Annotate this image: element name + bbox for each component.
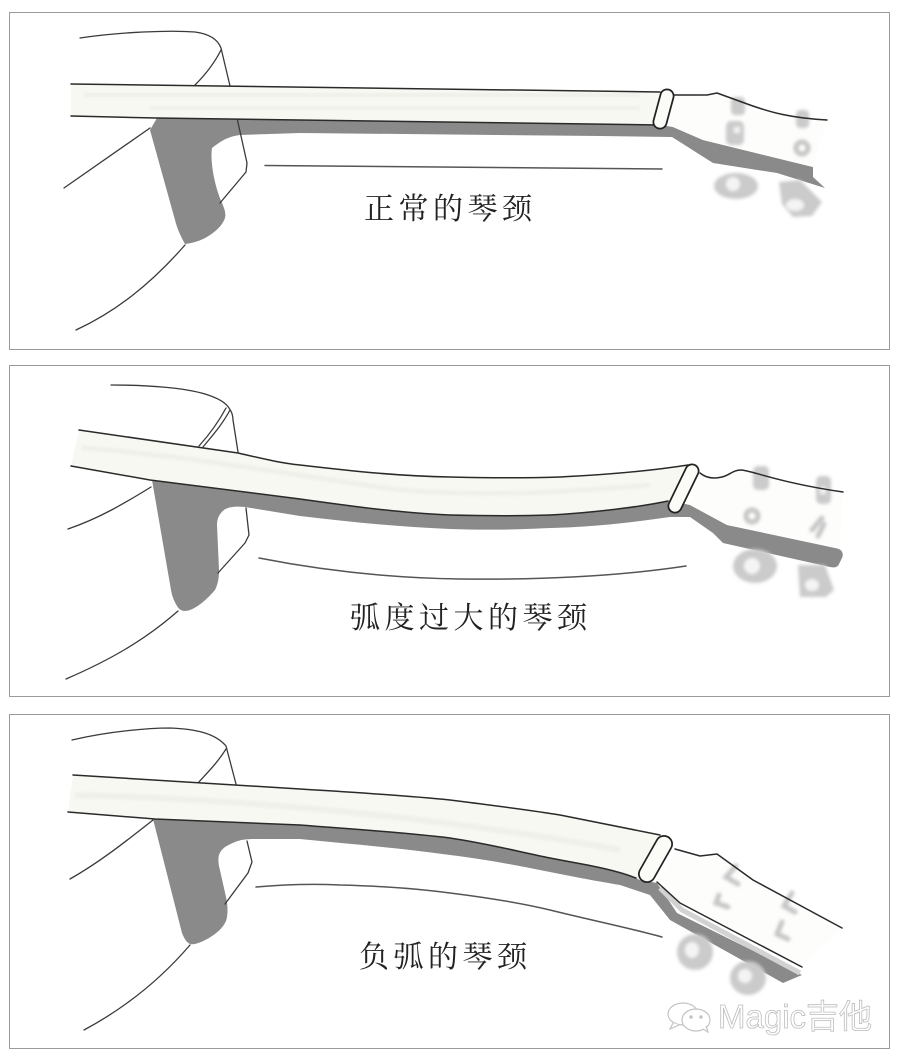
headstock xyxy=(657,850,842,967)
watermark xyxy=(668,998,872,1035)
baseline xyxy=(265,166,662,169)
panel: excessive relief neck xyxy=(10,366,890,696)
fretboard xyxy=(68,775,662,880)
guitar body outline xyxy=(70,728,236,1030)
panel: negative relief neck xyxy=(10,714,890,1048)
tuners xyxy=(714,97,822,217)
guitar body outline xyxy=(64,31,230,330)
icon: wechat bubbles xyxy=(668,1003,710,1032)
watermark text: Magic吉他 xyxy=(718,998,872,1035)
fretboard xyxy=(71,84,660,125)
headstock xyxy=(672,93,827,167)
caption: 弧度过大的琴颈 xyxy=(350,602,592,635)
body joint line xyxy=(220,118,247,203)
neck heel and back shadow xyxy=(152,480,843,611)
body joint line xyxy=(225,841,252,904)
headstock outline xyxy=(672,93,827,120)
baseline xyxy=(259,558,686,579)
nut xyxy=(660,96,667,122)
fretboard xyxy=(71,430,690,516)
neck heel and back shadow xyxy=(153,819,802,983)
panel: normal neck xyxy=(10,12,890,350)
nut xyxy=(675,471,692,506)
caption: 正常的琴颈 xyxy=(364,193,536,226)
neck heel and back shadow xyxy=(150,118,825,244)
guitar body outline xyxy=(66,385,238,679)
baseline xyxy=(256,884,662,937)
body joint line xyxy=(218,508,249,573)
caption: 负弧的琴颈 xyxy=(359,941,532,974)
headstock outline xyxy=(657,849,842,967)
tuners xyxy=(677,866,795,995)
nut xyxy=(647,844,664,874)
tuners xyxy=(733,466,834,597)
headstock outline xyxy=(700,470,843,492)
headstock xyxy=(690,470,843,548)
